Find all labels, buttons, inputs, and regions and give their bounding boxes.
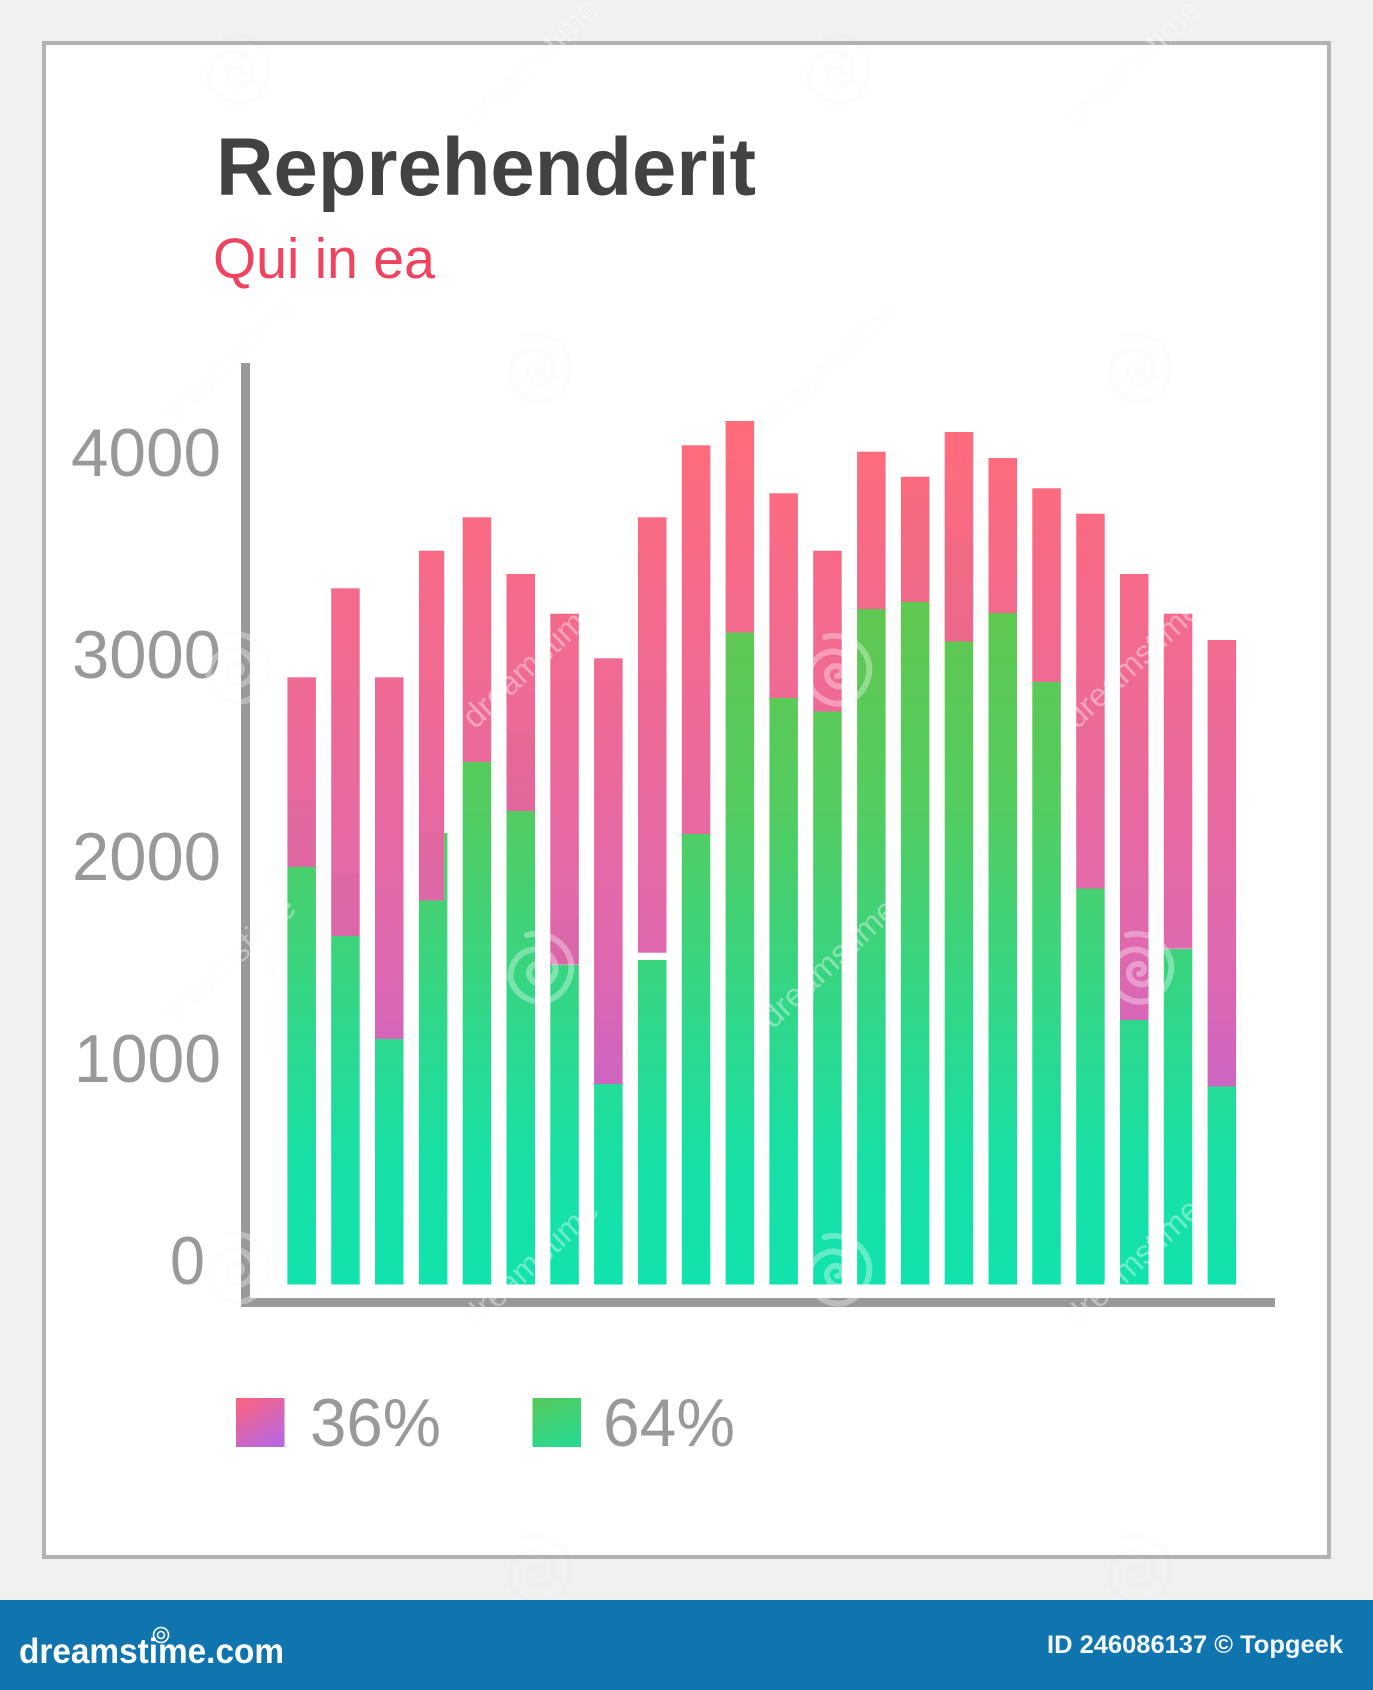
footer logo text: dreamstime.com bbox=[19, 1632, 284, 1671]
subtitle: Qui in ea bbox=[213, 227, 435, 291]
watermark text: dreamstime bbox=[152, 288, 303, 433]
watermark text: dreamstime bbox=[455, 590, 606, 735]
y-axis labels: 4000 bbox=[71, 415, 221, 491]
y-axis labels: 2000 bbox=[72, 819, 221, 895]
pink series bars bbox=[287, 421, 1236, 1087]
legend value: 64%: 64% bbox=[603, 1385, 735, 1461]
footer bar bbox=[0, 1600, 1373, 1690]
green series bars bbox=[287, 602, 1236, 1284]
legend swatch: green bbox=[532, 1398, 581, 1447]
y-axis labels: 0 bbox=[170, 1223, 205, 1299]
watermark spirals over bars bbox=[209, 634, 1171, 1304]
darker overlap patches bbox=[287, 493, 973, 965]
y-axis labels: 1000 bbox=[74, 1021, 221, 1097]
watermark text bbox=[152, 0, 1208, 1335]
footer credit: ID 246086137 © Topgeek bbox=[1047, 1631, 1343, 1659]
watermark text: dreamstime bbox=[455, 1190, 606, 1335]
watermark spirals bbox=[209, 36, 1170, 1604]
legend value: 36%: 36% bbox=[310, 1385, 441, 1461]
watermark text: dreamstime bbox=[1057, 1190, 1208, 1335]
legend bbox=[236, 1385, 735, 1461]
watermark text: dreamstime bbox=[753, 890, 904, 1035]
icon: logo spiral bbox=[154, 1628, 168, 1642]
watermark text: dreamstime bbox=[152, 888, 303, 1033]
y-axis labels: 3000 bbox=[72, 617, 221, 693]
chart axes bbox=[241, 363, 1275, 1307]
watermark text: dreamstime bbox=[1057, 590, 1208, 735]
stacked bars bbox=[287, 421, 1236, 1284]
legend swatch: pink bbox=[236, 1398, 284, 1447]
y-axis labels bbox=[71, 415, 221, 1299]
title: Reprehenderit bbox=[216, 122, 756, 213]
watermark text: dreamstime bbox=[755, 290, 906, 435]
